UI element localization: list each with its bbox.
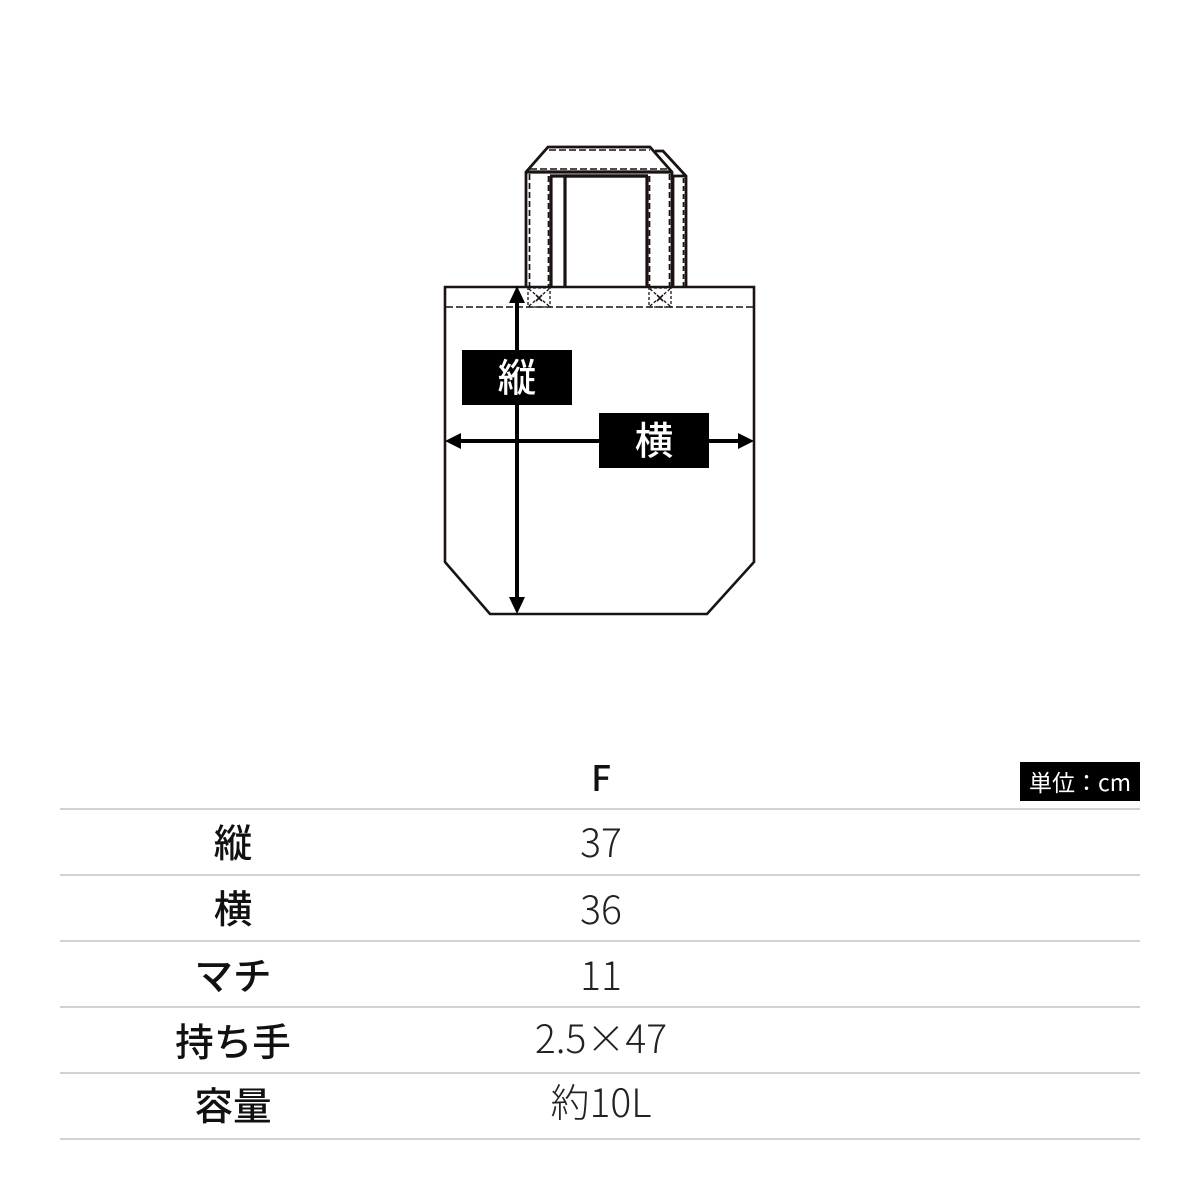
front handle	[526, 147, 672, 287]
value: 2.5×47: 2.5×47	[535, 1009, 667, 1065]
row label: 縦: 縦	[214, 813, 252, 869]
size table	[60, 751, 1140, 1140]
value: 11: 11	[580, 946, 622, 1002]
label: 縦	[462, 348, 572, 405]
back handle	[550, 151, 686, 287]
label: 横: 横	[635, 410, 673, 466]
value: 37: 37	[580, 813, 622, 869]
vertical measure arrow	[509, 286, 525, 614]
row label: 持ち手: 持ち手	[175, 1012, 291, 1068]
handle stitching boxes	[528, 288, 671, 307]
value: 約10L: 約10L	[550, 1073, 652, 1129]
bag body outline	[445, 287, 754, 614]
row label: 容量: 容量	[194, 1076, 272, 1132]
hem stitching line	[446, 306, 753, 308]
unit badge: 単位：cm	[1029, 764, 1131, 798]
horizontal measure arrow	[445, 433, 754, 449]
label: 縦: 縦	[498, 348, 536, 404]
row label: マチ: マチ	[194, 946, 272, 1002]
value: 36: 36	[580, 880, 622, 936]
tote bag diagram	[444, 146, 756, 616]
label: 横	[599, 410, 709, 468]
bag handles	[526, 147, 686, 307]
row label: 横: 横	[214, 879, 252, 935]
column heading: F: F	[591, 751, 611, 802]
